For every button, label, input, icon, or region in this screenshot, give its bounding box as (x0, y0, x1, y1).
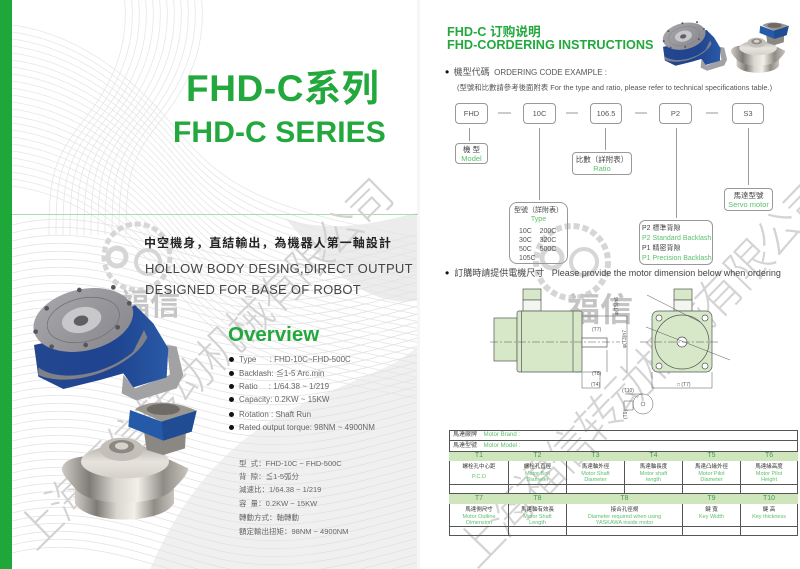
code box P2 (659, 103, 692, 124)
label backlash: P2 標準背隙 (642, 225, 681, 232)
motor spec table: T1 (475, 452, 483, 459)
overview chinese list: 容 量：0.2KW ~ 15KW (239, 499, 317, 508)
code box 10C: 10C (533, 109, 546, 118)
overview chinese list: 減速比：1/64.38 ~ 1/219 (239, 485, 321, 494)
motor spec table: 接合孔徑規 (611, 507, 638, 513)
left logo brand watermark text: 福信 (120, 289, 180, 322)
overview chinese list: 型 式：FHD-10C ~ FHD-500C (239, 459, 342, 468)
label servo motor: Servo motor (728, 200, 769, 209)
overview chinese list: 背 隙：≦1-5弧分 (239, 472, 299, 481)
label type: Type (531, 216, 546, 223)
overview chinese list (239, 459, 348, 536)
motor spec table: T4 (649, 452, 658, 459)
motor spec table: T8 (620, 494, 629, 502)
motor spec table: Dimension (466, 520, 492, 526)
label type: 10C 200C (519, 228, 556, 235)
code box S3: S3 (743, 109, 753, 118)
motor spec table: T6 (765, 452, 773, 459)
motor spec table: Motor Pilot (756, 471, 782, 477)
code box S3 (732, 103, 764, 124)
motor spec table: 馬達凸緣外徑 (695, 464, 728, 470)
motor spec table: 鍵 高 (763, 507, 775, 513)
label model: Model (461, 154, 482, 163)
motor spec table: 鍵 寬 (705, 507, 718, 513)
label model (455, 143, 488, 164)
motor spec table: Diameter required when using (588, 514, 661, 520)
label backlash: P2 Standard Backlash (642, 235, 711, 242)
motor drawing: (T10) (622, 388, 634, 394)
overview chinese list: 轉動方式：軸轉動 (239, 513, 299, 522)
overview english list: Rated output torque: 98NM ~ 4900NM (239, 423, 375, 432)
motor spec table: Motor Bolt (525, 471, 550, 477)
motor spec table: Motor Shaft (523, 514, 552, 520)
motor spec table: Motor Outline (462, 514, 496, 520)
motor spec table: Length (529, 520, 546, 526)
motor drawing: (T9) (623, 410, 629, 419)
motor spec table: 馬達軸外徑 (582, 464, 609, 470)
label type: 105C (519, 255, 536, 262)
motor spec table: T2 (533, 452, 542, 459)
motor spec table: 馬達廠牌 Motor Brand : (453, 432, 520, 438)
motor drawing: φ(T3)h7 (622, 330, 628, 348)
motor spec table: 馬達軸有效長 (521, 507, 554, 513)
code box FHD (455, 103, 488, 124)
overview english list: Type : FHD-10C~FHD-500C (239, 355, 351, 364)
motor spec table: YASKAWA inside motor (596, 520, 653, 526)
motor dimension note: • 訂購時請提供電機尺寸 Please provide the motor dimension below when ordering (445, 266, 781, 280)
motor spec table: Diameter (700, 477, 723, 483)
overview english list: Capacity: 0.2KW ~ 15KW (239, 395, 329, 404)
label type: 50C 500C (519, 246, 556, 253)
motor spec table: 馬達緣高度 (755, 464, 783, 470)
overview english list: Backlash: ≦1-5 Arc.min (239, 369, 324, 378)
motor spec table: T3 (591, 452, 600, 459)
ordering code example heading: • 機型代碼 ORDERING CODE EXAMPLE : (445, 65, 607, 79)
motor spec table: T9 (707, 494, 716, 502)
tagline english: DESIGNED FOR BASE OF ROBOT (145, 282, 361, 297)
label ratio: 比數（詳附表） (576, 155, 628, 164)
label backlash: P1 精密背隙 (642, 245, 681, 252)
label backlash (639, 220, 713, 265)
overview english list: Rotation : Shaft Run (239, 410, 311, 419)
green side bar (0, 0, 12, 569)
code box P2: P2 (671, 109, 680, 118)
motor spec table: 馬達型號 Motor Model : (453, 442, 520, 448)
label servo motor: 馬達型號 (734, 191, 764, 200)
label model: 機 型 (463, 145, 480, 154)
title chinese: FHD-C系列 (186, 68, 379, 109)
overview chinese list: 額定輸出扭矩：98NM ~ 4900NM (239, 527, 348, 536)
motor spec table: T8 (533, 494, 542, 502)
motor spec table: 螺栓孔直徑 (524, 464, 551, 470)
code box 10C (523, 103, 556, 124)
motor spec table: 馬達軸長度 (640, 464, 667, 470)
ordering heading (447, 25, 654, 52)
label servo motor (724, 188, 773, 211)
right logo brand watermark text: 福信 (567, 291, 633, 328)
overview heading: Overview (228, 323, 319, 346)
motor spec table: length (646, 477, 661, 483)
motor spec table: T10 (763, 494, 775, 502)
label ratio (572, 152, 632, 175)
motor spec table: 螺栓孔中心距 (462, 464, 496, 470)
motor spec table: Motor Shaft (581, 471, 610, 477)
motor spec table: T7 (475, 494, 483, 502)
tagline chinese: 中空機身，直結輸出，為機器人第一軸設計 (144, 236, 392, 250)
overview english list: Ratio : 1/64.38 ~ 1/219 (239, 382, 329, 391)
code box 106.5: 106.5 (597, 109, 615, 118)
motor spec table: Diameter (584, 477, 607, 483)
motor spec table: Diameter (526, 477, 549, 483)
ordering heading: FHD-CORDERING INSTRUCTIONS (447, 38, 654, 52)
motor spec table: T5 (707, 452, 716, 459)
code box FHD: FHD (464, 109, 479, 118)
motor spec table (449, 430, 798, 536)
motor spec table: 馬達側尺寸 (465, 507, 493, 513)
tagline english: HOLLOW BODY DESING,DIRECT OUTPUT (145, 261, 413, 276)
motor drawing: (T4) (591, 382, 600, 388)
motor spec table: Motor Pilot (698, 471, 725, 477)
motor spec table: Key Width (699, 514, 724, 520)
motor drawing: (T7) (592, 327, 602, 333)
code box 106.5 (590, 103, 622, 124)
motor spec table: P.C.D (472, 474, 486, 480)
motor drawing: (T8) (592, 371, 602, 377)
label backlash: P1 Precision Backlash (642, 255, 712, 262)
label ratio: Ratio (593, 164, 611, 173)
motor drawing: φ(T5)h6 (614, 297, 620, 315)
ordering heading: FHD-C 订购说明 (447, 25, 541, 39)
motor drawing: □ (T7) (677, 382, 691, 388)
label type: 型號（詳附表） (514, 207, 563, 214)
overview english list (229, 355, 375, 432)
motor spec table: Motor shaft (640, 471, 667, 477)
watermark left: 上海福信转动机械有限公司 (8, 171, 402, 559)
tagline english (145, 261, 413, 297)
green divider line (12, 214, 418, 215)
title english: FHD-C SERIES (173, 116, 386, 149)
motor spec table: Key thickness (752, 514, 786, 520)
motor spec table: Height (761, 477, 777, 483)
background wave pattern (12, 0, 420, 569)
ordering note: (型號和比數請參考後面附表 For the type and ratio, please refer to technical specifications table.) (457, 83, 772, 92)
label type (509, 202, 568, 264)
label type: 30C 320C (519, 237, 556, 244)
